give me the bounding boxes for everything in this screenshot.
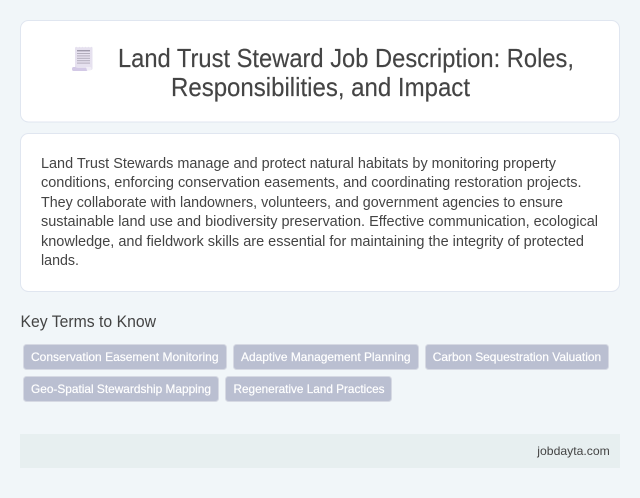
description text: knowledge, and fieldwork skills are essential for maintaining the integrity of protected — [41, 234, 584, 250]
description text: lands. — [41, 253, 79, 269]
tag: adaptive management planning: Adaptive Management Planning — [241, 350, 410, 364]
tag: adaptive management planning — [234, 344, 418, 370]
description text: sustainable land use and biodiversity preservation. Effective communication, ecological — [41, 214, 598, 230]
tag: carbon sequestration valuation — [426, 344, 608, 370]
description text: Land Trust Stewards manage and protect natural habitats by monitoring property — [41, 156, 557, 172]
description text: They collaborate with landowners, volunteers, and government agencies to ensure — [41, 195, 563, 211]
title: Land Trust Steward Job Description: Roles, — [118, 45, 574, 73]
title: Responsibilities, and Impact — [171, 74, 470, 102]
icon: document scroll — [72, 47, 92, 71]
tag: conservation easement monitoring: Conservation Easement Monitoring — [31, 350, 218, 364]
title — [118, 45, 574, 102]
panel: header card — [20, 20, 620, 122]
tag: geo-spatial stewardship mapping: Geo-Spatial Stewardship Mapping — [31, 382, 211, 396]
tag: carbon sequestration valuation: Carbon Sequestration Valuation — [433, 350, 601, 364]
footer bar — [20, 434, 620, 468]
tag: regenerative land practices — [226, 376, 392, 402]
description text: conditions, enforcing conservation easements, and coordinating restoration projects. — [41, 175, 582, 191]
tag: regenerative land practices: Regenerative Land Practices — [234, 382, 384, 396]
tag: geo-spatial stewardship mapping — [24, 376, 218, 402]
heading: key terms: Key Terms to Know — [20, 313, 156, 331]
description text — [41, 156, 598, 269]
footer source text: jobdayta.com — [536, 444, 610, 458]
panel: description card — [20, 134, 620, 292]
tag: conservation easement monitoring — [24, 344, 226, 370]
